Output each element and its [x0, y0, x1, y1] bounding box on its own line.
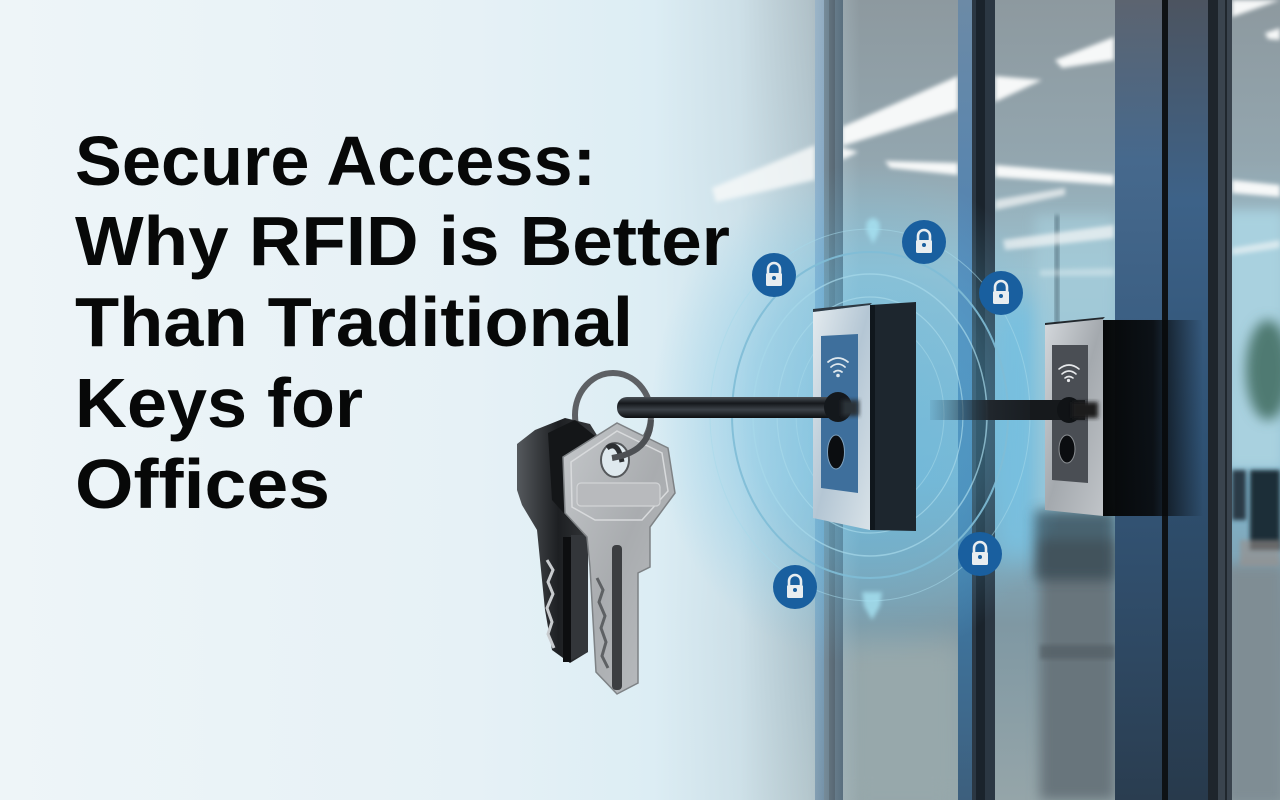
icon: lock badge right — [979, 271, 1023, 315]
title: Secure Access: — [75, 122, 596, 200]
icon: lock badge top left — [752, 253, 796, 297]
title: Why RFID is Better — [75, 202, 730, 280]
door-mounted reader (main) — [813, 302, 916, 531]
background: blurred office behind glass — [716, 0, 1280, 800]
white fade over left half — [0, 0, 860, 800]
icon: lock badge lower left — [773, 565, 817, 609]
card slot — [1059, 435, 1075, 463]
front of key ring — [612, 420, 651, 458]
reader handle — [617, 392, 859, 422]
second reader — [1030, 317, 1203, 516]
door frame: main post — [1115, 0, 1232, 800]
title: Offices — [75, 445, 330, 523]
icon: lock badge lower right — [958, 532, 1002, 576]
key ring — [575, 373, 651, 457]
icon: lock badge top — [902, 220, 946, 264]
second reader: handle — [930, 400, 1080, 420]
icon: wifi on second reader — [1059, 365, 1079, 382]
silver front key — [563, 423, 675, 694]
faint pin markers — [862, 218, 882, 620]
title: Than Traditional — [75, 283, 633, 361]
title — [75, 122, 730, 523]
card slot — [828, 435, 844, 469]
door frame: left mullion — [815, 0, 843, 800]
RFID signal glow — [650, 165, 1080, 665]
icon: wifi on reader — [828, 358, 848, 377]
door frame: centre mullion — [958, 0, 995, 800]
ceiling lights — [712, 0, 1280, 276]
signal rings — [710, 229, 1030, 601]
title: Keys for — [75, 364, 363, 442]
black back key — [517, 418, 600, 663]
